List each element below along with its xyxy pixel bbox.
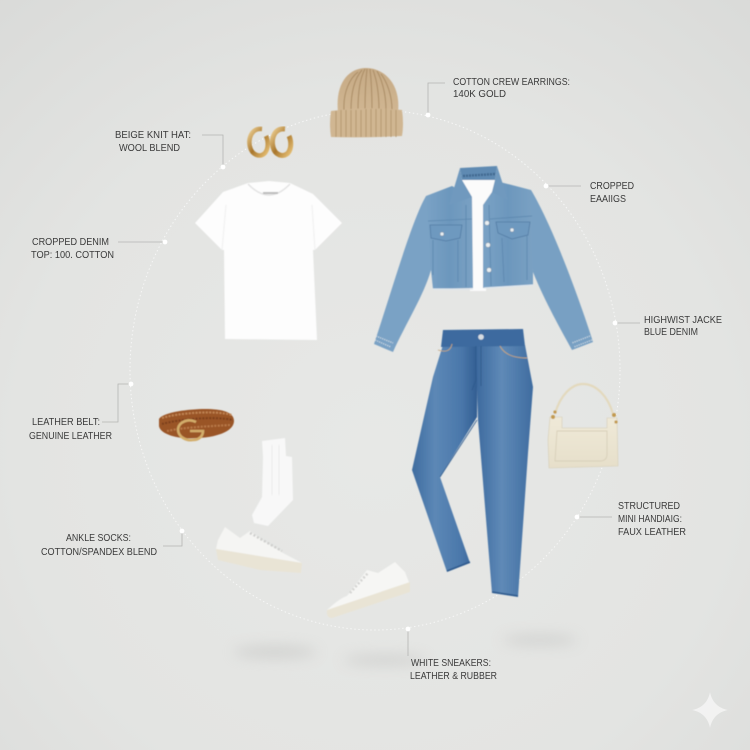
- label: handbag line two: MINI HANDIAIG:: [618, 514, 682, 525]
- left leg: [412, 345, 478, 572]
- leader lines and nodes: [102, 83, 640, 656]
- item: cropped denim jacket: [374, 166, 593, 352]
- waistband: [441, 329, 525, 347]
- label: top: CROPPED DENIM: [32, 237, 109, 248]
- icon: sparkle watermark: [692, 692, 728, 728]
- floor shadows: [233, 635, 578, 665]
- label: hat material: WOOL BLEND: [119, 143, 180, 154]
- label: cropped: CROPPED: [590, 181, 634, 192]
- label: earrings: COTTON CREW EARRINGS:: [453, 77, 570, 88]
- label: eaaiigs: EAAIIGS: [590, 194, 626, 205]
- left front panel: [426, 186, 473, 289]
- label: belt: LEATHER BELT:: [32, 417, 100, 428]
- label: jacket material: BLUE DENIM: [644, 327, 698, 338]
- label: sneakers material: LEATHER & RUBBER: [410, 671, 497, 682]
- item: blue high-waist jeans: [412, 329, 533, 597]
- label: handbag material: FAUX LEATHER: [618, 527, 686, 538]
- label: hat: BEIGE KNIT HAT:: [115, 130, 191, 141]
- item: white t-shirt: [195, 181, 342, 340]
- label: socks material: COTTON/SPANDEX BLEND: [41, 547, 157, 558]
- right leg: [476, 345, 533, 597]
- label: top material: TOP: 100. COTTON: [31, 250, 114, 261]
- label: earrings material: 140K GOLD: [453, 89, 506, 100]
- label: jacket: HIGHWIST JACKE: [644, 315, 722, 326]
- collar: [460, 166, 497, 180]
- buttons: [440, 221, 514, 272]
- sleeves: [374, 196, 440, 352]
- item: braided leather belt: [159, 409, 234, 440]
- item: white sneaker right: [327, 562, 410, 618]
- item: white ankle sock: [252, 438, 293, 526]
- label: sneakers: WHITE SNEAKERS:: [411, 658, 491, 669]
- item: white sneaker left: [216, 527, 302, 573]
- item: beige knit hat: [330, 68, 403, 137]
- right front panel: [483, 182, 533, 288]
- item: gold hoop earrings: [249, 129, 291, 155]
- label: socks: ANKLE SOCKS:: [66, 533, 131, 544]
- label: handbag: STRUCTURED: [618, 501, 680, 512]
- label: belt material: GENUINE LEATHER: [29, 431, 112, 442]
- pockets and seams: [430, 225, 462, 241]
- dotted orbit ring: [130, 110, 620, 630]
- item: cream handbag: [548, 384, 618, 468]
